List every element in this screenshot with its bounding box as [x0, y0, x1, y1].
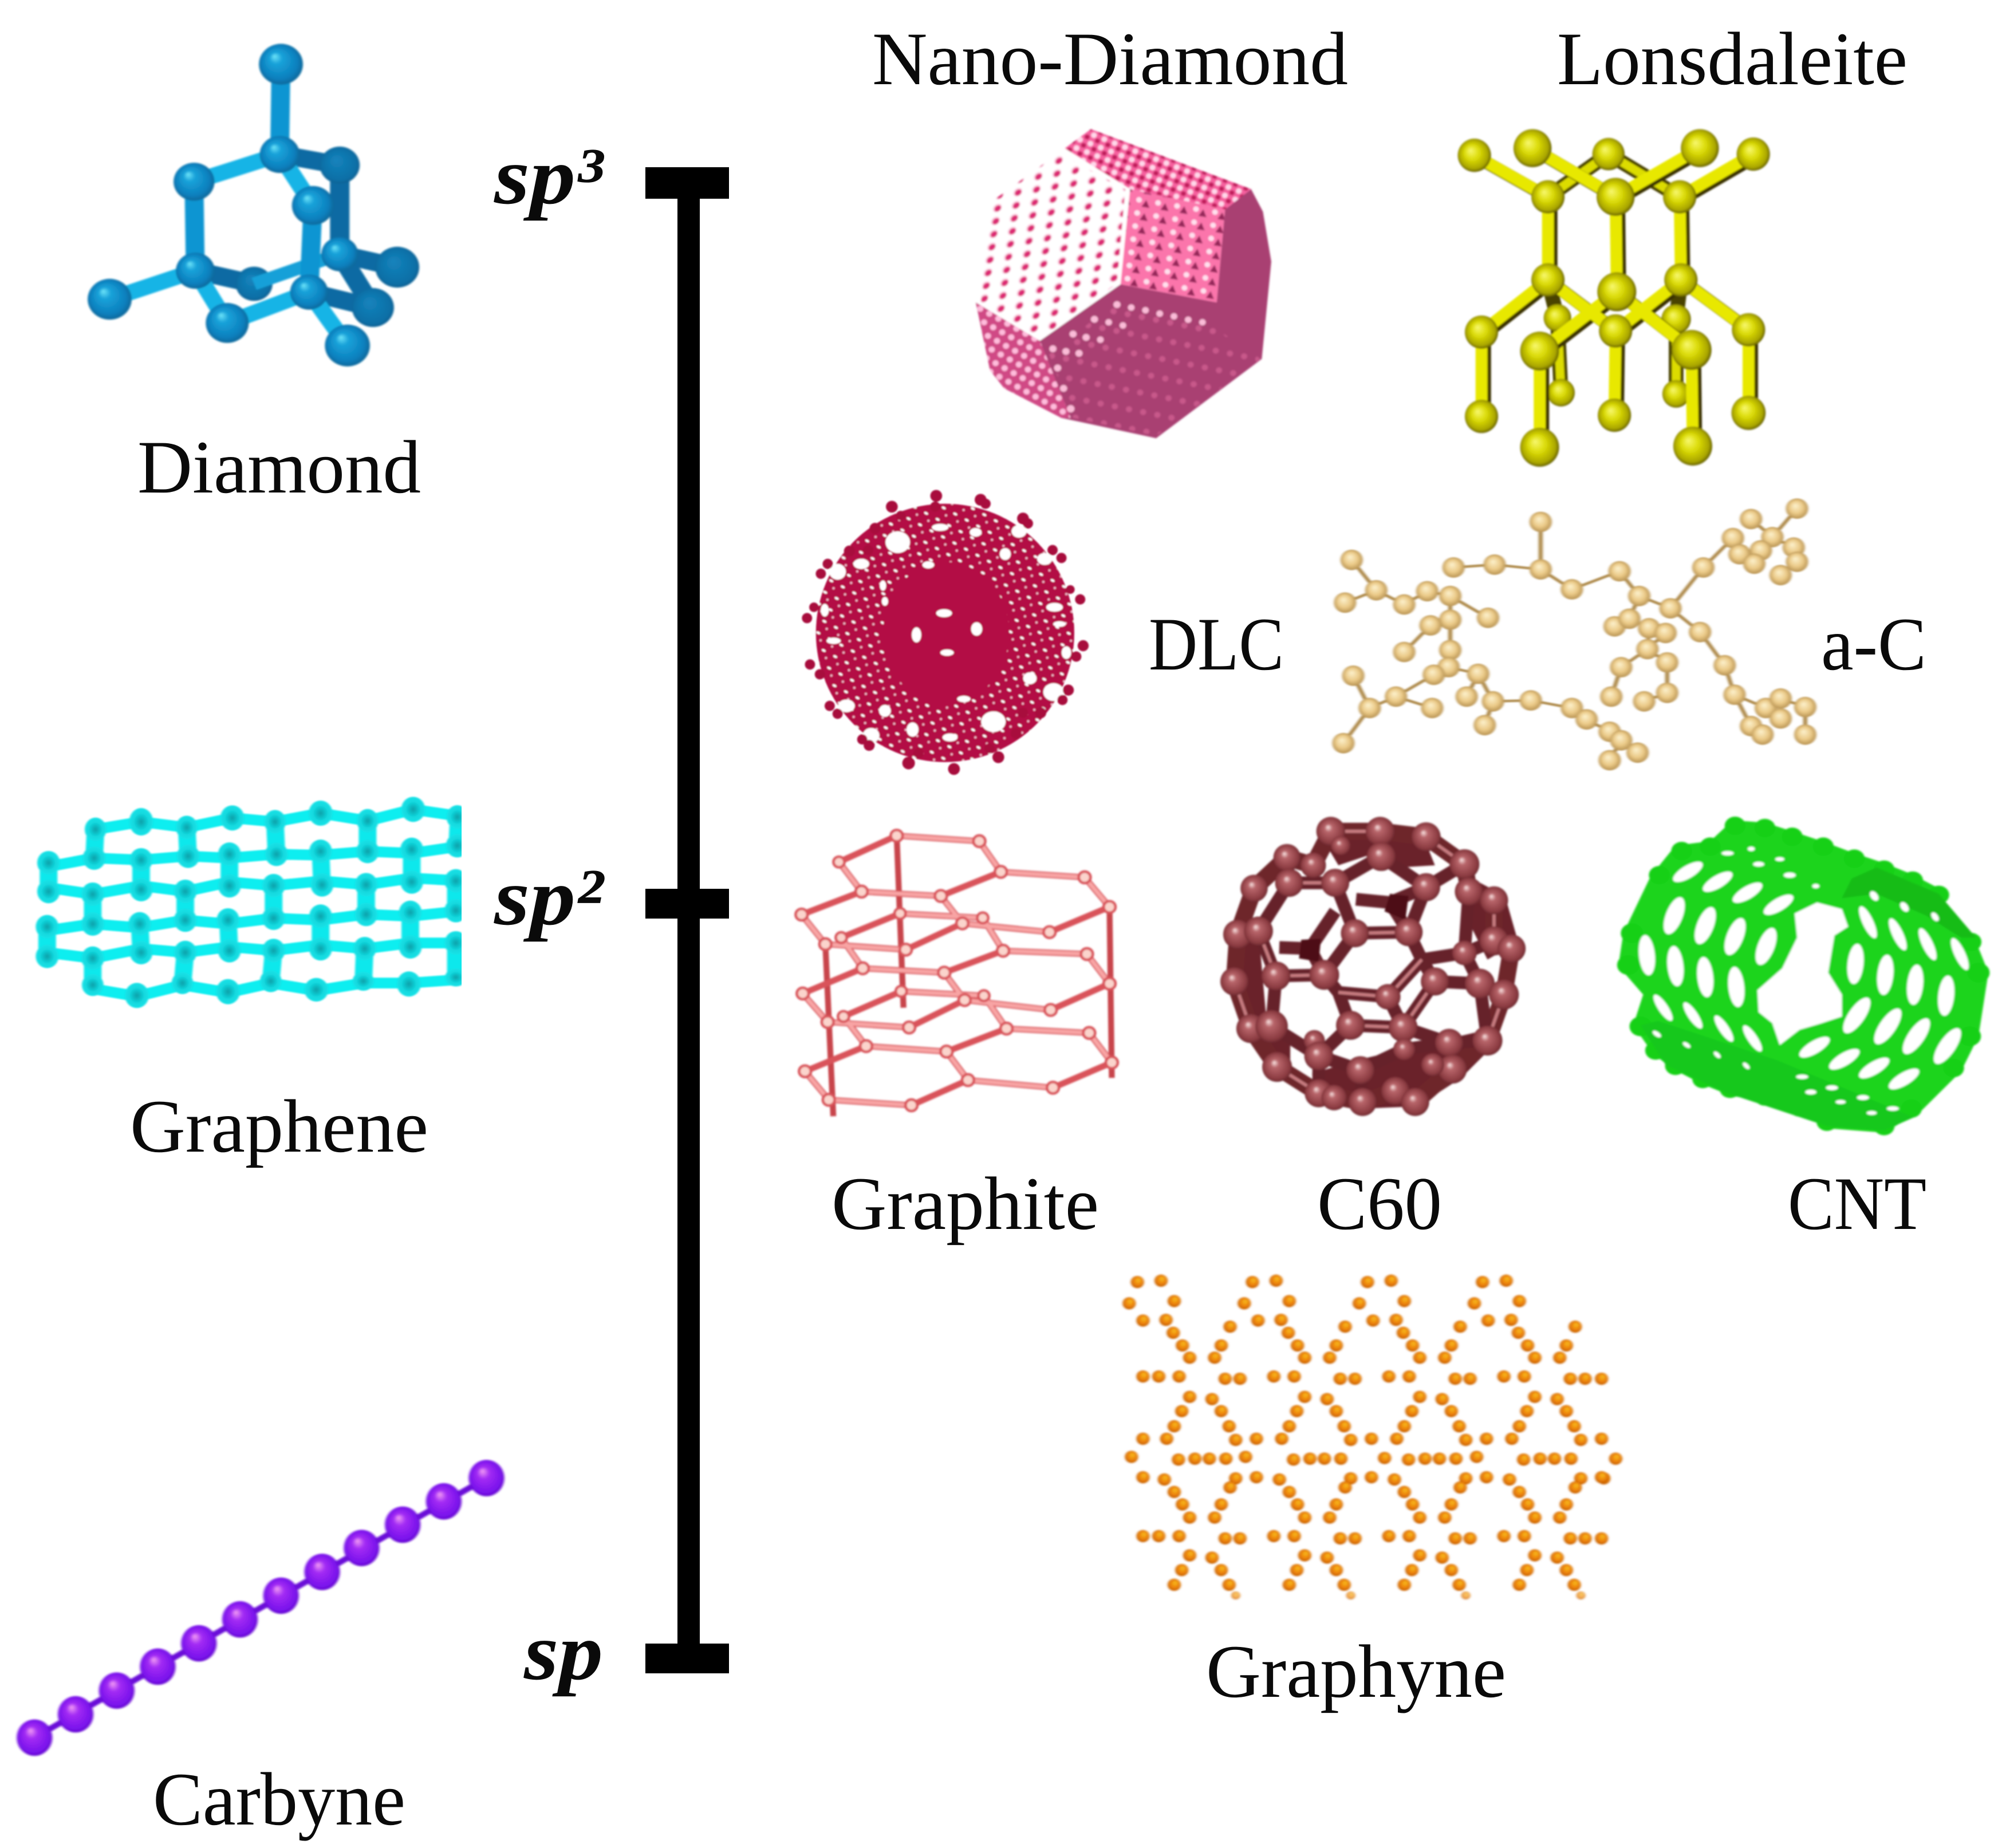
sp3 tick — [645, 167, 729, 199]
molecule: C60 fullerene — [1220, 817, 1526, 1116]
molecule: carbyne — [17, 1460, 505, 1756]
label: sp: sp — [523, 1606, 603, 1697]
label: C60: C60 — [1317, 1161, 1442, 1246]
label: DLC: DLC — [1149, 602, 1284, 686]
sp tick — [645, 1644, 729, 1673]
label: Nano-Diamond: Nano-Diamond — [872, 17, 1348, 101]
label: Lonsdaleite: Lonsdaleite — [1557, 17, 1908, 101]
label: a-C: a-C — [1821, 602, 1926, 686]
label: CNT: CNT — [1788, 1161, 1926, 1246]
molecule: diamond — [88, 44, 419, 367]
molecule: graphyne — [1122, 1275, 1622, 1599]
molecule: nano-diamond — [976, 129, 1271, 438]
label: Graphite: Graphite — [831, 1161, 1099, 1246]
hybridization scale axis — [645, 167, 729, 1673]
molecule: graphene — [36, 797, 468, 1008]
molecule: DLC — [802, 490, 1089, 775]
label: Graphene: Graphene — [130, 1084, 428, 1168]
label: sp3: sp³ — [494, 131, 605, 221]
label: sp2: sp² — [494, 852, 605, 942]
label: Carbyne: Carbyne — [153, 1757, 405, 1841]
sp2 tick — [645, 889, 729, 919]
molecule: lonsdaleite — [1458, 129, 1770, 467]
tube opening — [1757, 903, 1848, 1045]
label: Graphyne: Graphyne — [1206, 1629, 1506, 1713]
molecule: carbon nanotube — [1617, 817, 1989, 1135]
molecule: a-C — [1332, 498, 1816, 770]
label: Diamond: Diamond — [137, 425, 421, 509]
molecule: graphite — [795, 830, 1118, 1116]
